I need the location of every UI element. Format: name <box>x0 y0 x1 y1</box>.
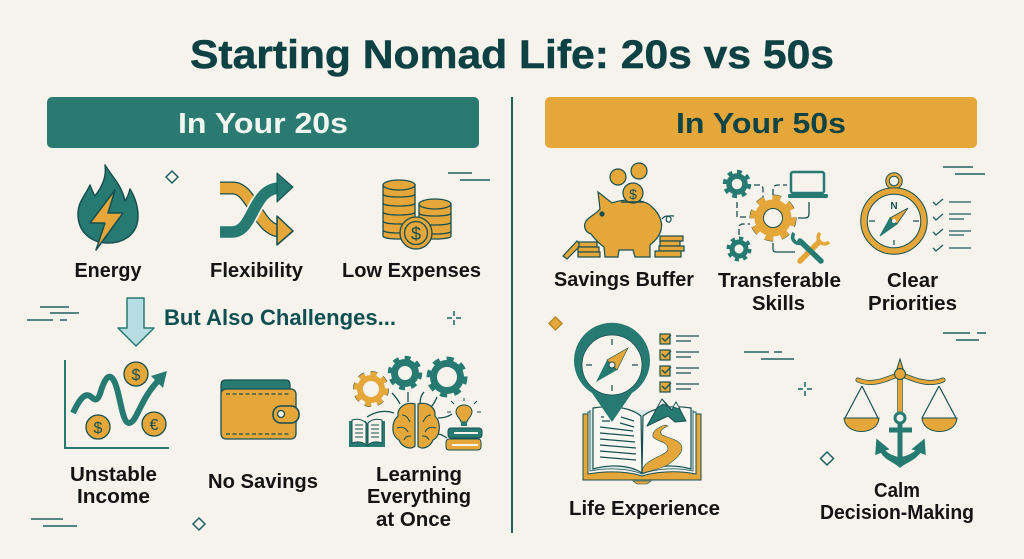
icon: brain with gears, books and bulb <box>349 358 482 450</box>
icon: unstable income chart: $ <box>94 420 103 437</box>
label: Learning Everything at Once: at Once <box>376 509 451 531</box>
icon: compass with checklist <box>864 174 971 251</box>
label: Transferable Skills: Transferable <box>718 270 841 292</box>
panel: In Your 50s strengths <box>554 163 974 524</box>
label: Energy: Energy <box>74 260 142 282</box>
icon: life experience book with compass pin <box>574 323 701 484</box>
icon: coin stacks <box>383 180 451 249</box>
label: Learning Everything at Once: Everything <box>367 486 471 508</box>
label: Learning Everything at Once <box>367 464 471 531</box>
label: Calm Decision-Making: Decision-Making <box>820 502 974 524</box>
icon: wallet <box>221 380 299 439</box>
label: Unstable Income: Unstable <box>70 464 157 486</box>
title: Starting Nomad Life: 20s vs 50s <box>190 33 834 77</box>
icon: compass with checklist: N <box>890 201 898 212</box>
icon: unstable income chart <box>65 360 169 448</box>
label: Transferable Skills <box>718 270 841 315</box>
icon: unstable income chart: € <box>150 417 159 434</box>
icon: flame with lightning bolt <box>78 165 138 250</box>
label: Transferable Skills: Skills <box>752 293 805 315</box>
label: Flexibility: Flexibility <box>210 260 304 282</box>
panel: In Your 20s strengths <box>74 165 481 282</box>
label: Unstable Income <box>70 464 157 508</box>
icon: unstable income chart: $ <box>132 367 141 384</box>
icon: piggy bank <box>563 163 684 259</box>
label: Calm Decision-Making: Calm <box>874 480 920 502</box>
icon: coin stacks: $ <box>411 224 421 244</box>
label: Life Experience: Life Experience <box>569 498 720 520</box>
icon: down arrow <box>118 298 154 346</box>
icon: scales with anchor <box>844 359 957 467</box>
label: Unstable Income: Income <box>77 486 150 508</box>
label: Savings Buffer: Savings Buffer <box>554 269 694 291</box>
icon: piggy bank: $ <box>629 186 637 202</box>
label: No Savings: No Savings <box>208 471 318 493</box>
header: In Your 50s <box>545 97 977 148</box>
label: Low Expenses: Low Expenses <box>342 260 481 282</box>
label: Clear Priorities: Clear <box>887 270 938 292</box>
subheading: But Also Challenges: But Also Challenges... <box>164 305 396 330</box>
icon: gears, laptop and tools <box>725 172 829 261</box>
header: In Your 20s <box>47 97 479 148</box>
label: Clear Priorities: Priorities <box>868 293 957 315</box>
icon: flexibility crossing arrows <box>220 173 293 245</box>
panel: In Your 20s challenges <box>65 358 482 531</box>
label: Clear Priorities <box>868 270 957 315</box>
header: In Your 20s: In Your 20s <box>178 108 348 140</box>
label: Calm Decision-Making <box>820 480 974 524</box>
header: In Your 50s: In Your 50s <box>676 108 846 140</box>
label: Learning Everything at Once: Learning <box>376 464 462 486</box>
